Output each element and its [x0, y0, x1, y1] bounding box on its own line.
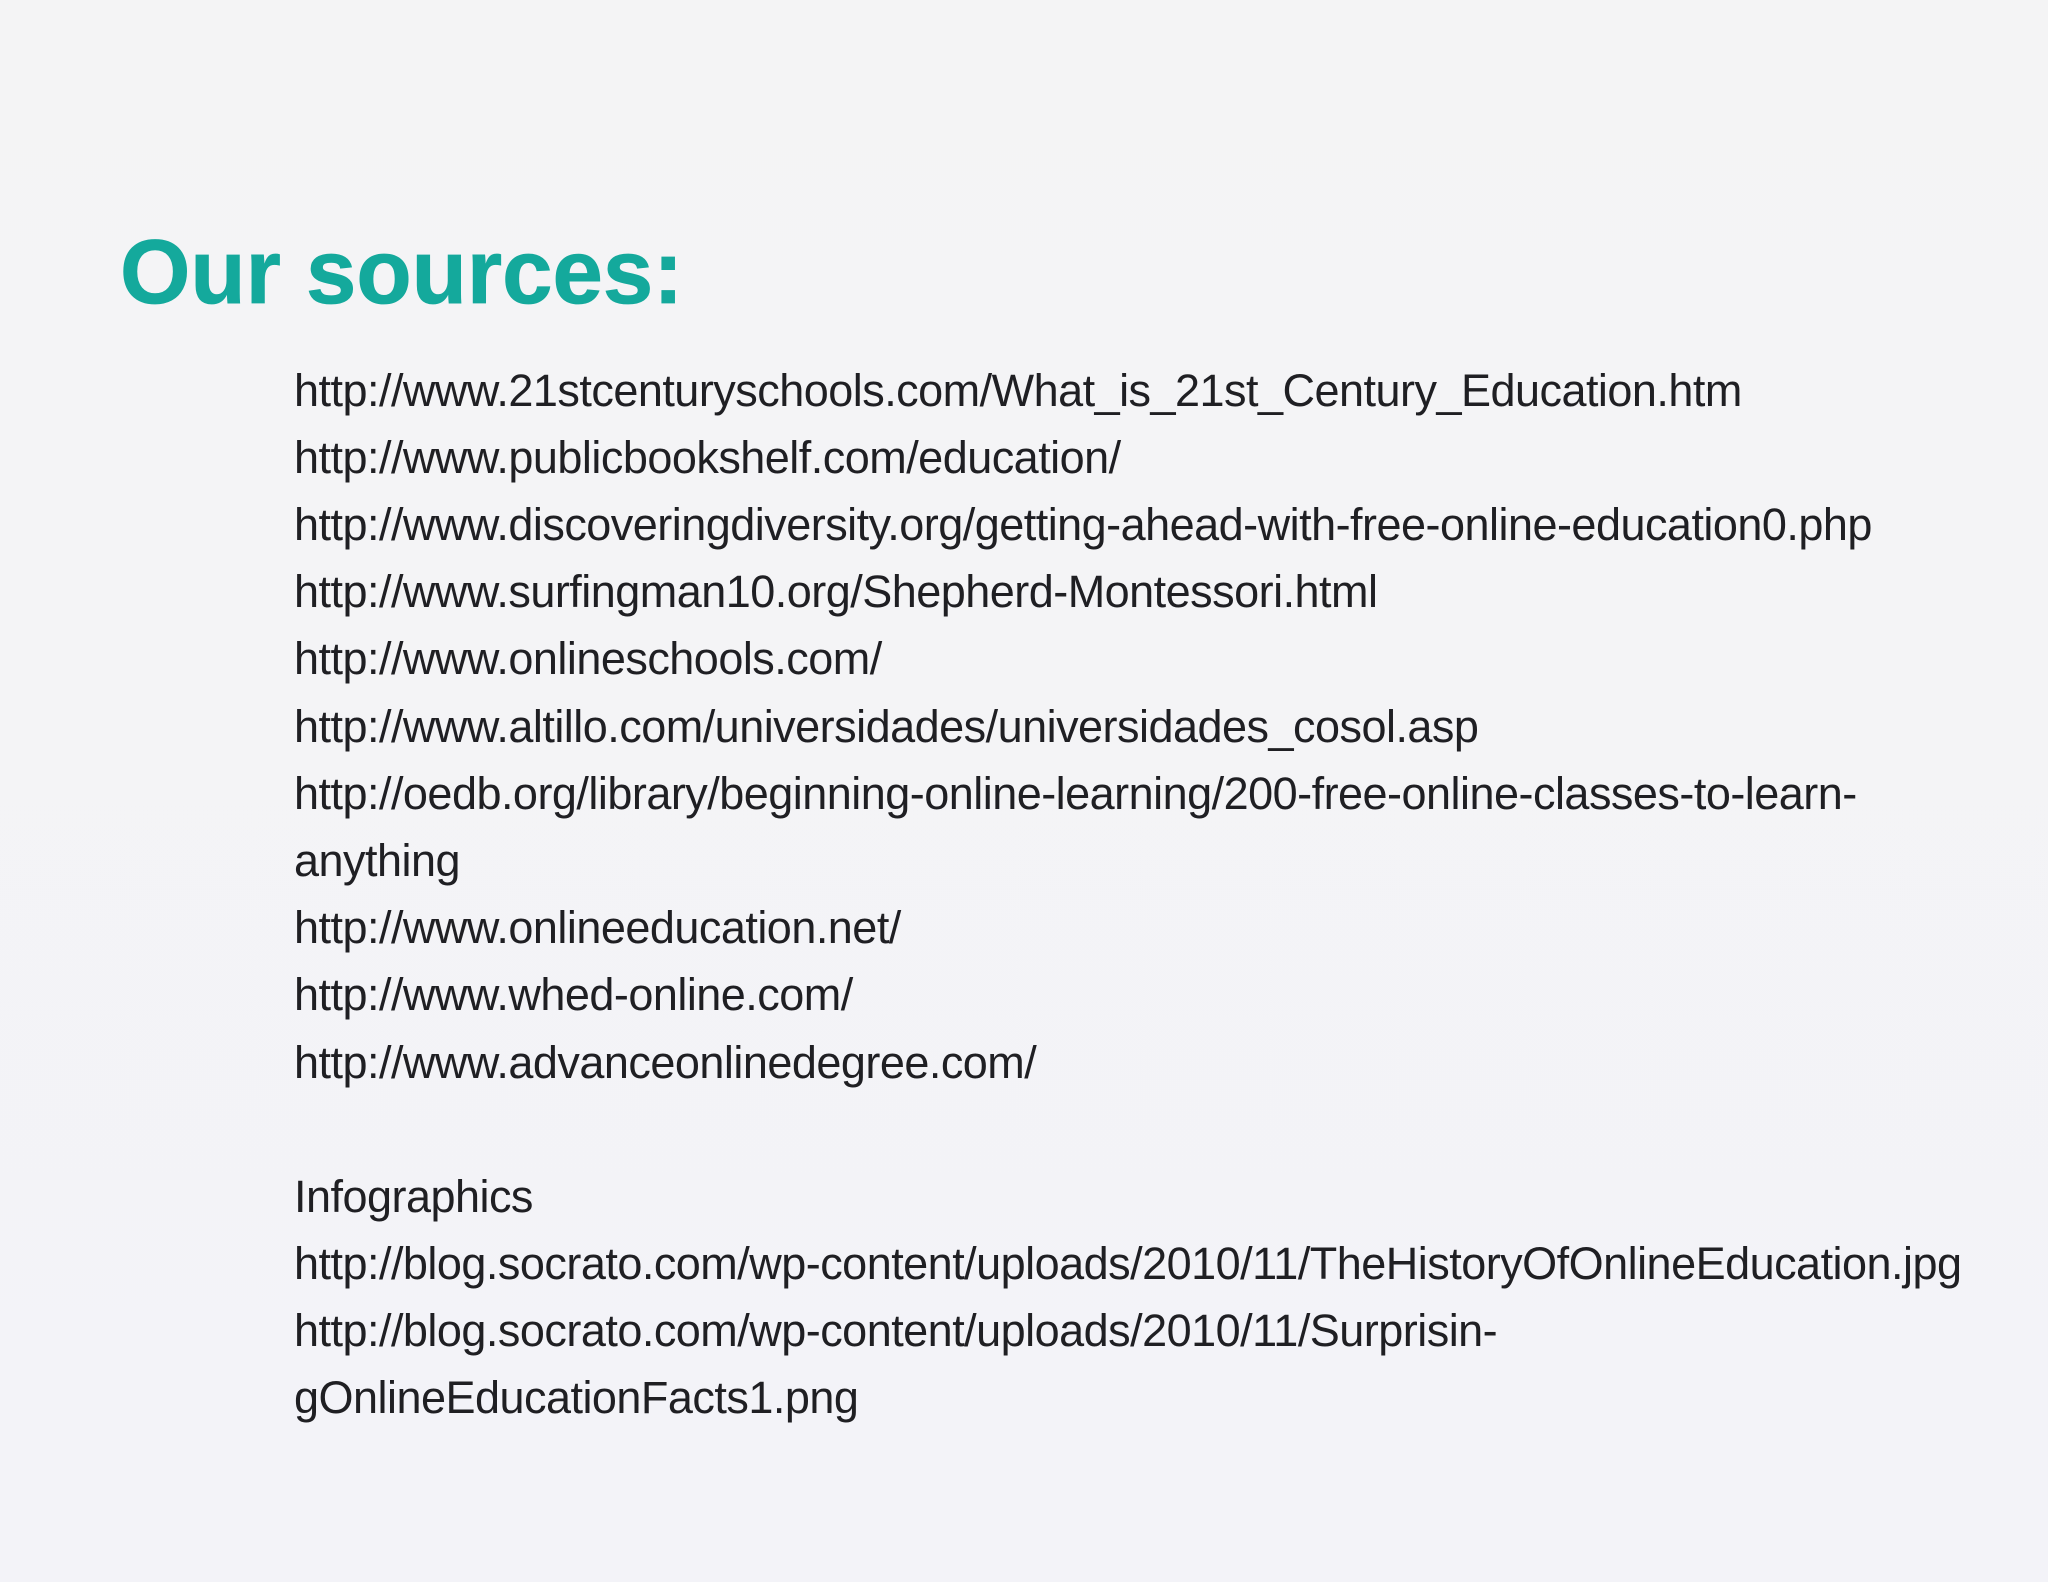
web sources list: http://www.21stcenturyschools.com/What_is_21st_Century_Education.htm	[294, 364, 1742, 416]
infographics sources list: gOnlineEducationFacts1.png	[294, 1372, 858, 1423]
web sources list: http://www.onlineschools.com/	[294, 633, 882, 684]
web sources list: http://www.discoveringdiversity.org/getting-ahead-with-free-online-education0.php	[294, 499, 1872, 550]
web sources list: http://www.onlineeducation.net/	[294, 902, 901, 953]
web sources list: http://www.surfingman10.org/Shepherd-Montessori.html	[294, 566, 1377, 617]
web sources list: http://oedb.org/library/beginning-online-learning/200-free-online-classes-to-learn-	[294, 768, 1857, 819]
infographics sources list: Infographics	[294, 1171, 533, 1222]
web sources list: http://www.altillo.com/universidades/universidades_cosol.asp	[294, 701, 1478, 752]
web sources list: http://www.publicbookshelf.com/education/	[294, 432, 1121, 483]
web sources list: http://www.whed-online.com/	[294, 969, 853, 1020]
title: Our sources:	[120, 222, 683, 322]
infographics sources list: http://blog.socrato.com/wp-content/uploads/2010/11/TheHistoryOfOnlineEducation.jpg	[294, 1238, 1962, 1289]
web sources list: anything	[294, 835, 460, 886]
text block: list of sources	[294, 364, 1962, 1423]
infographics sources list	[294, 1171, 1962, 1423]
infographics sources list: http://blog.socrato.com/wp-content/uploads/2010/11/Surprisin-	[294, 1305, 1497, 1356]
web sources list	[294, 364, 1872, 1088]
web sources list: http://www.advanceonlinedegree.com/	[294, 1037, 1036, 1088]
